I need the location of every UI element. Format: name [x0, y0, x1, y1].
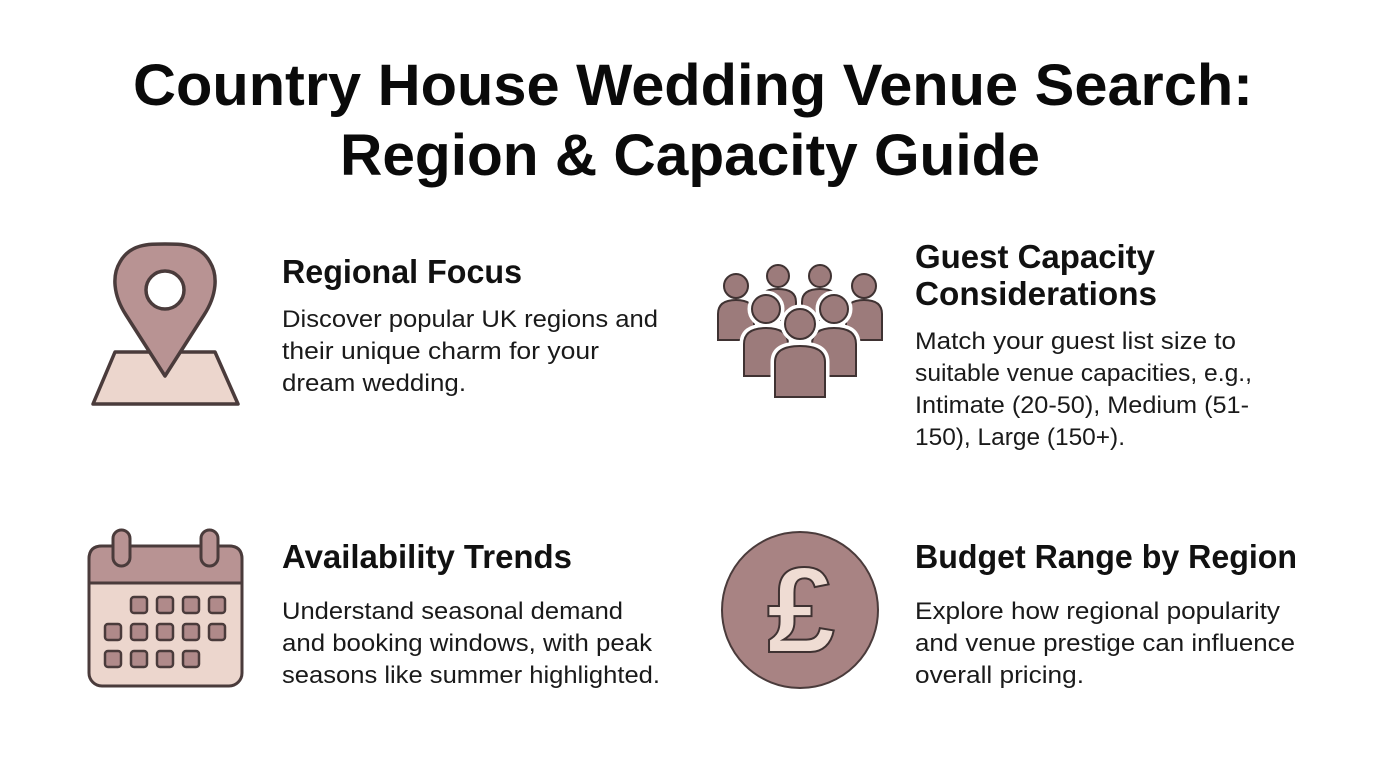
text: regional focus body: Discover popular UK regions and [282, 306, 658, 333]
icon: pound coin [722, 532, 878, 688]
text: budget body [915, 598, 1295, 689]
title [133, 53, 1253, 188]
heading: guest capacity [915, 238, 1157, 312]
title: Country House Wedding Venue Search: [133, 53, 1253, 118]
text: availability body: Understand seasonal demand [282, 598, 623, 625]
text: guest capacity body: suitable venue capacities, e.g., [915, 360, 1252, 387]
text: regional focus body [282, 306, 658, 397]
heading: guest capacity: Considerations [915, 275, 1157, 312]
text: guest capacity body: Match your guest list size to [915, 328, 1236, 355]
text: regional focus body: dream wedding. [282, 370, 466, 397]
text: guest capacity body: Intimate (20-50), Medium (51- [915, 392, 1249, 419]
text: budget body: overall pricing. [915, 662, 1084, 689]
text: guest capacity body: 150), Large (150+). [915, 424, 1125, 451]
text: regional focus body: their unique charm for your [282, 338, 599, 365]
text: availability body: and booking windows, with peak [282, 630, 653, 657]
text: availability body [282, 598, 660, 689]
heading: availability trends: Availability Trends [282, 538, 572, 575]
heading: regional focus: Regional Focus [282, 253, 522, 290]
title: Region & Capacity Guide [340, 123, 1040, 188]
heading: budget range: Budget Range by Region [915, 538, 1297, 575]
text: budget body: and venue prestige can influence [915, 630, 1295, 657]
icon: pound coin: £ [767, 542, 835, 678]
heading: guest capacity: Guest Capacity [915, 238, 1156, 275]
icon: map pin [93, 244, 238, 404]
icon: calendar [89, 530, 242, 686]
icon: group of people [718, 265, 882, 397]
text: guest capacity body [915, 328, 1252, 451]
text: availability body: seasons like summer highlighted. [282, 662, 660, 689]
text: budget body: Explore how regional popularity [915, 598, 1280, 625]
